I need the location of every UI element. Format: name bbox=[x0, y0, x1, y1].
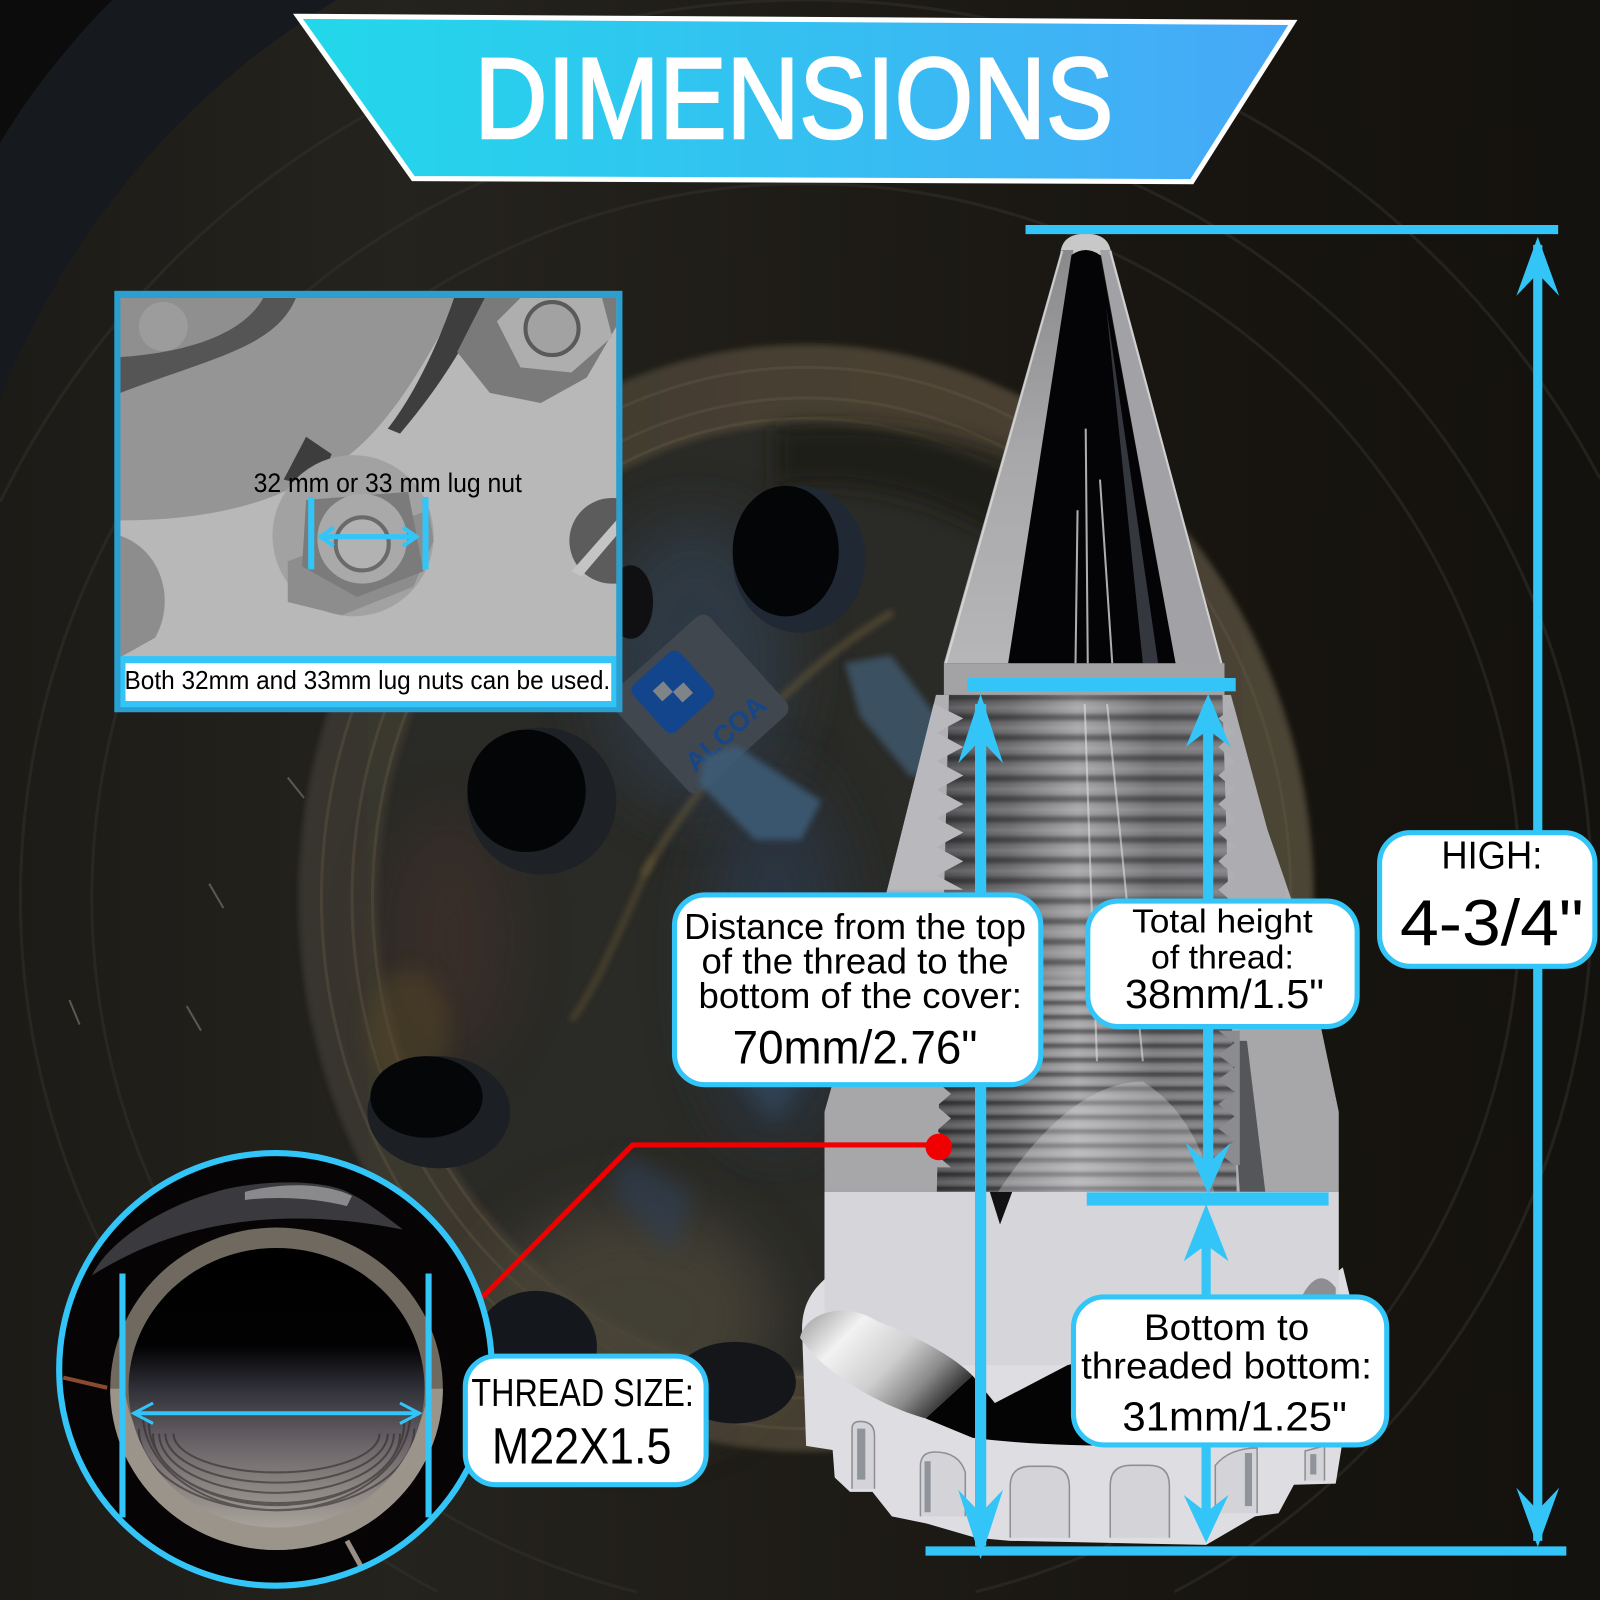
wheel bolt holes bbox=[367, 486, 865, 1423]
ALCOA logo decal: ALCOA bbox=[679, 689, 772, 778]
callout: overall height: 4-3/4" bbox=[1400, 886, 1584, 959]
notch shadows bbox=[857, 1429, 1316, 1512]
callout: total height of thread: of thread: bbox=[1151, 939, 1294, 976]
chrome bowl reflection bbox=[800, 1311, 972, 1418]
dimension: top of thread to bottom of cover bbox=[958, 685, 1236, 1559]
thread bore circle close-up bbox=[59, 1153, 492, 1586]
callout: distance from top of thread: 70mm/2.76" bbox=[733, 1021, 978, 1073]
title banner bbox=[298, 16, 1293, 182]
callout: bottom to threaded bottom: threaded bottom: bbox=[1081, 1346, 1372, 1387]
callout: bottom to threaded bottom bbox=[1073, 1297, 1387, 1445]
ALCOA logo decal bbox=[605, 610, 793, 798]
dimension: bottom to threaded bottom bbox=[1184, 1204, 1229, 1543]
callout: bottom to threaded bottom: Bottom to bbox=[1144, 1307, 1309, 1348]
polished dark centre bbox=[1008, 250, 1176, 663]
red pointer line bbox=[482, 1134, 952, 1298]
lower hex body bbox=[824, 1192, 1339, 1365]
callout: overall height: HIGH: bbox=[1441, 834, 1542, 877]
valve stems bbox=[699, 745, 821, 840]
callout: total height of thread: Total height bbox=[1132, 904, 1313, 941]
measurement arrow bbox=[311, 497, 426, 569]
tip cap bbox=[1060, 234, 1111, 255]
translucent band bbox=[944, 663, 1224, 695]
dimension: thread height bbox=[1087, 694, 1329, 1199]
callout: total height of thread bbox=[1088, 901, 1357, 1027]
inset panel: lug nut size: Both 32mm and 33mm lug nuts can be used. bbox=[124, 667, 610, 695]
inset panel: lug nut size bbox=[117, 294, 655, 709]
title text: DIMENSIONS bbox=[474, 35, 1113, 163]
flange notches bbox=[852, 1421, 1324, 1538]
grayscale lug nut photo bbox=[120, 298, 655, 657]
tire sidewall scratches bbox=[69, 778, 304, 1031]
thread teeth bbox=[878, 704, 1286, 1167]
cone left strip bbox=[944, 250, 1073, 663]
callout: bottom to threaded bottom: 31mm/1.25" bbox=[1122, 1394, 1347, 1440]
cone right strip bbox=[1100, 250, 1223, 667]
callout: distance from top of thread bbox=[674, 895, 1041, 1085]
callout: thread size: THREAD SIZE: bbox=[471, 1372, 694, 1415]
callout: distance from top of thread: of the thread to the bbox=[702, 941, 1009, 981]
callout text: 32 mm or 33 mm lug nut bbox=[254, 468, 523, 498]
callout: distance from top of thread: bottom of the cover: bbox=[698, 976, 1022, 1016]
lower cone facets bbox=[816, 695, 1347, 1195]
threaded core bbox=[934, 695, 1240, 1195]
callout: total height of thread: 38mm/1.5" bbox=[1125, 971, 1324, 1017]
caption bbox=[120, 656, 616, 707]
bowl opening bbox=[926, 1347, 1133, 1446]
callout: overall height bbox=[1380, 833, 1595, 966]
callout: thread size bbox=[465, 1356, 706, 1485]
flange bbox=[802, 1267, 1357, 1545]
bore measurement arrow bbox=[122, 1273, 429, 1517]
spike nut product bbox=[800, 234, 1357, 1545]
callout: distance from top of thread: Distance from the top bbox=[684, 907, 1026, 947]
overall height dimension bbox=[926, 230, 1566, 1551]
callout: thread size: M22X1.5 bbox=[492, 1417, 671, 1474]
wheel disc bbox=[301, 347, 1311, 1449]
